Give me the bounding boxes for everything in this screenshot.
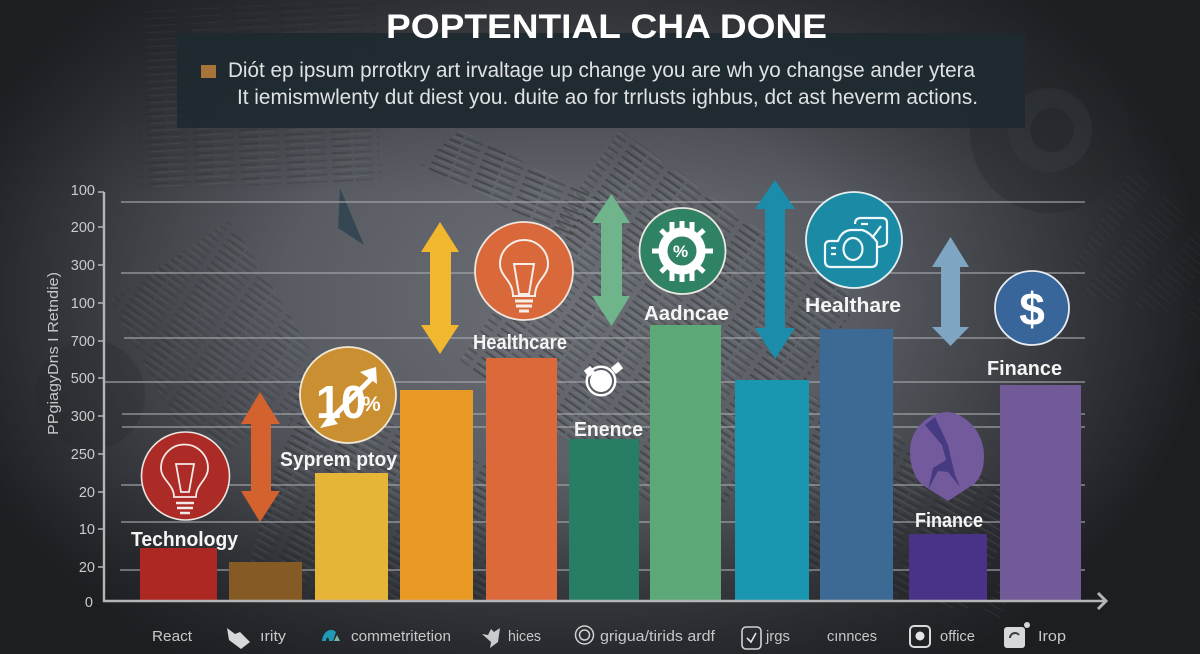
arrow: light blue double — [932, 237, 969, 346]
bar chart — [140, 325, 1081, 600]
arrow: orange double — [241, 392, 280, 522]
arrow: yellow double — [421, 222, 459, 354]
y axis labels: 200 — [71, 220, 95, 236]
labels: Finance — [915, 510, 983, 532]
y axis labels: 100 — [71, 183, 95, 199]
labels: Enence — [574, 419, 643, 441]
y axis labels: 0 — [85, 595, 93, 611]
labels: Syprem ptoy — [280, 449, 398, 471]
y axis labels: 700 — [71, 334, 95, 350]
y axis labels: 300 — [71, 258, 95, 274]
labels: Healthcare — [473, 332, 567, 354]
icon: red lightbulb — [142, 432, 230, 520]
legend: jrgs: jrgs — [765, 629, 790, 645]
legend: grigua: grigua/tirids ardf — [600, 629, 716, 645]
icon: green gear — [640, 208, 726, 294]
legend: hices: hices — [508, 629, 541, 645]
legend: cinnces: cınnces — [827, 629, 877, 645]
labels: Technology — [131, 529, 239, 551]
icon: white ring — [586, 364, 621, 396]
legend: irity — [227, 628, 287, 649]
y axis labels — [71, 183, 95, 611]
gridlines — [104, 202, 1085, 570]
icon: purple leaf — [910, 412, 984, 501]
icon: teal camera — [806, 192, 902, 288]
legend: react: React — [152, 629, 192, 645]
icon: orange lightbulb — [475, 222, 573, 320]
labels — [131, 295, 1062, 551]
panel: intro text — [177, 33, 1025, 128]
arrow: green double — [592, 194, 630, 326]
y axis labels: 20 — [79, 485, 95, 501]
y axis labels: 300 — [71, 409, 95, 425]
title: POPTENTIAL CHA DONE — [386, 8, 827, 46]
y axis labels: 250 — [71, 447, 95, 463]
icon: blue dollar — [995, 271, 1069, 345]
legend: grigua — [576, 626, 716, 645]
y axis labels: 500 — [71, 371, 95, 387]
legend: office — [910, 626, 975, 647]
labels: Aadncae — [644, 303, 729, 325]
legend: irop: Irop — [1038, 629, 1066, 645]
icon: 10 percent badge: % — [362, 393, 381, 416]
axes — [98, 192, 1106, 609]
y axis labels: 20 — [79, 560, 95, 576]
legend: office: office — [940, 629, 975, 645]
intro text line 2: It iemismwlenty dut diest you. duite ao for trrlusts ighbus, dct ast heverm actions. — [237, 86, 978, 109]
legend: hices — [482, 628, 541, 648]
legend: irop — [1004, 622, 1066, 648]
legend: commetitetion: commetritetion — [351, 629, 451, 645]
labels: Finance — [987, 358, 1062, 380]
y axis title: PPgiagyDns I Retndie) — [45, 272, 62, 435]
arrow: teal double — [755, 180, 795, 359]
icon: blue dollar: $ — [1019, 283, 1045, 335]
labels: Healthare — [805, 295, 901, 317]
icon: 10 percent badge — [300, 347, 396, 443]
y axis labels: 10 — [79, 522, 95, 538]
y axis labels: 100 — [71, 296, 95, 312]
icon: green gear: % — [673, 242, 688, 261]
bullet marker — [201, 65, 216, 78]
icon: 10 percent badge: 10 — [316, 376, 366, 428]
intro text line 1: Diót ep ipsum prrotkry art irvaltage up change you are wh yo changse ander ytera — [228, 59, 975, 82]
legend — [152, 622, 1066, 649]
legend: irity: ırity — [260, 629, 287, 645]
legend: jrgs — [742, 627, 790, 649]
